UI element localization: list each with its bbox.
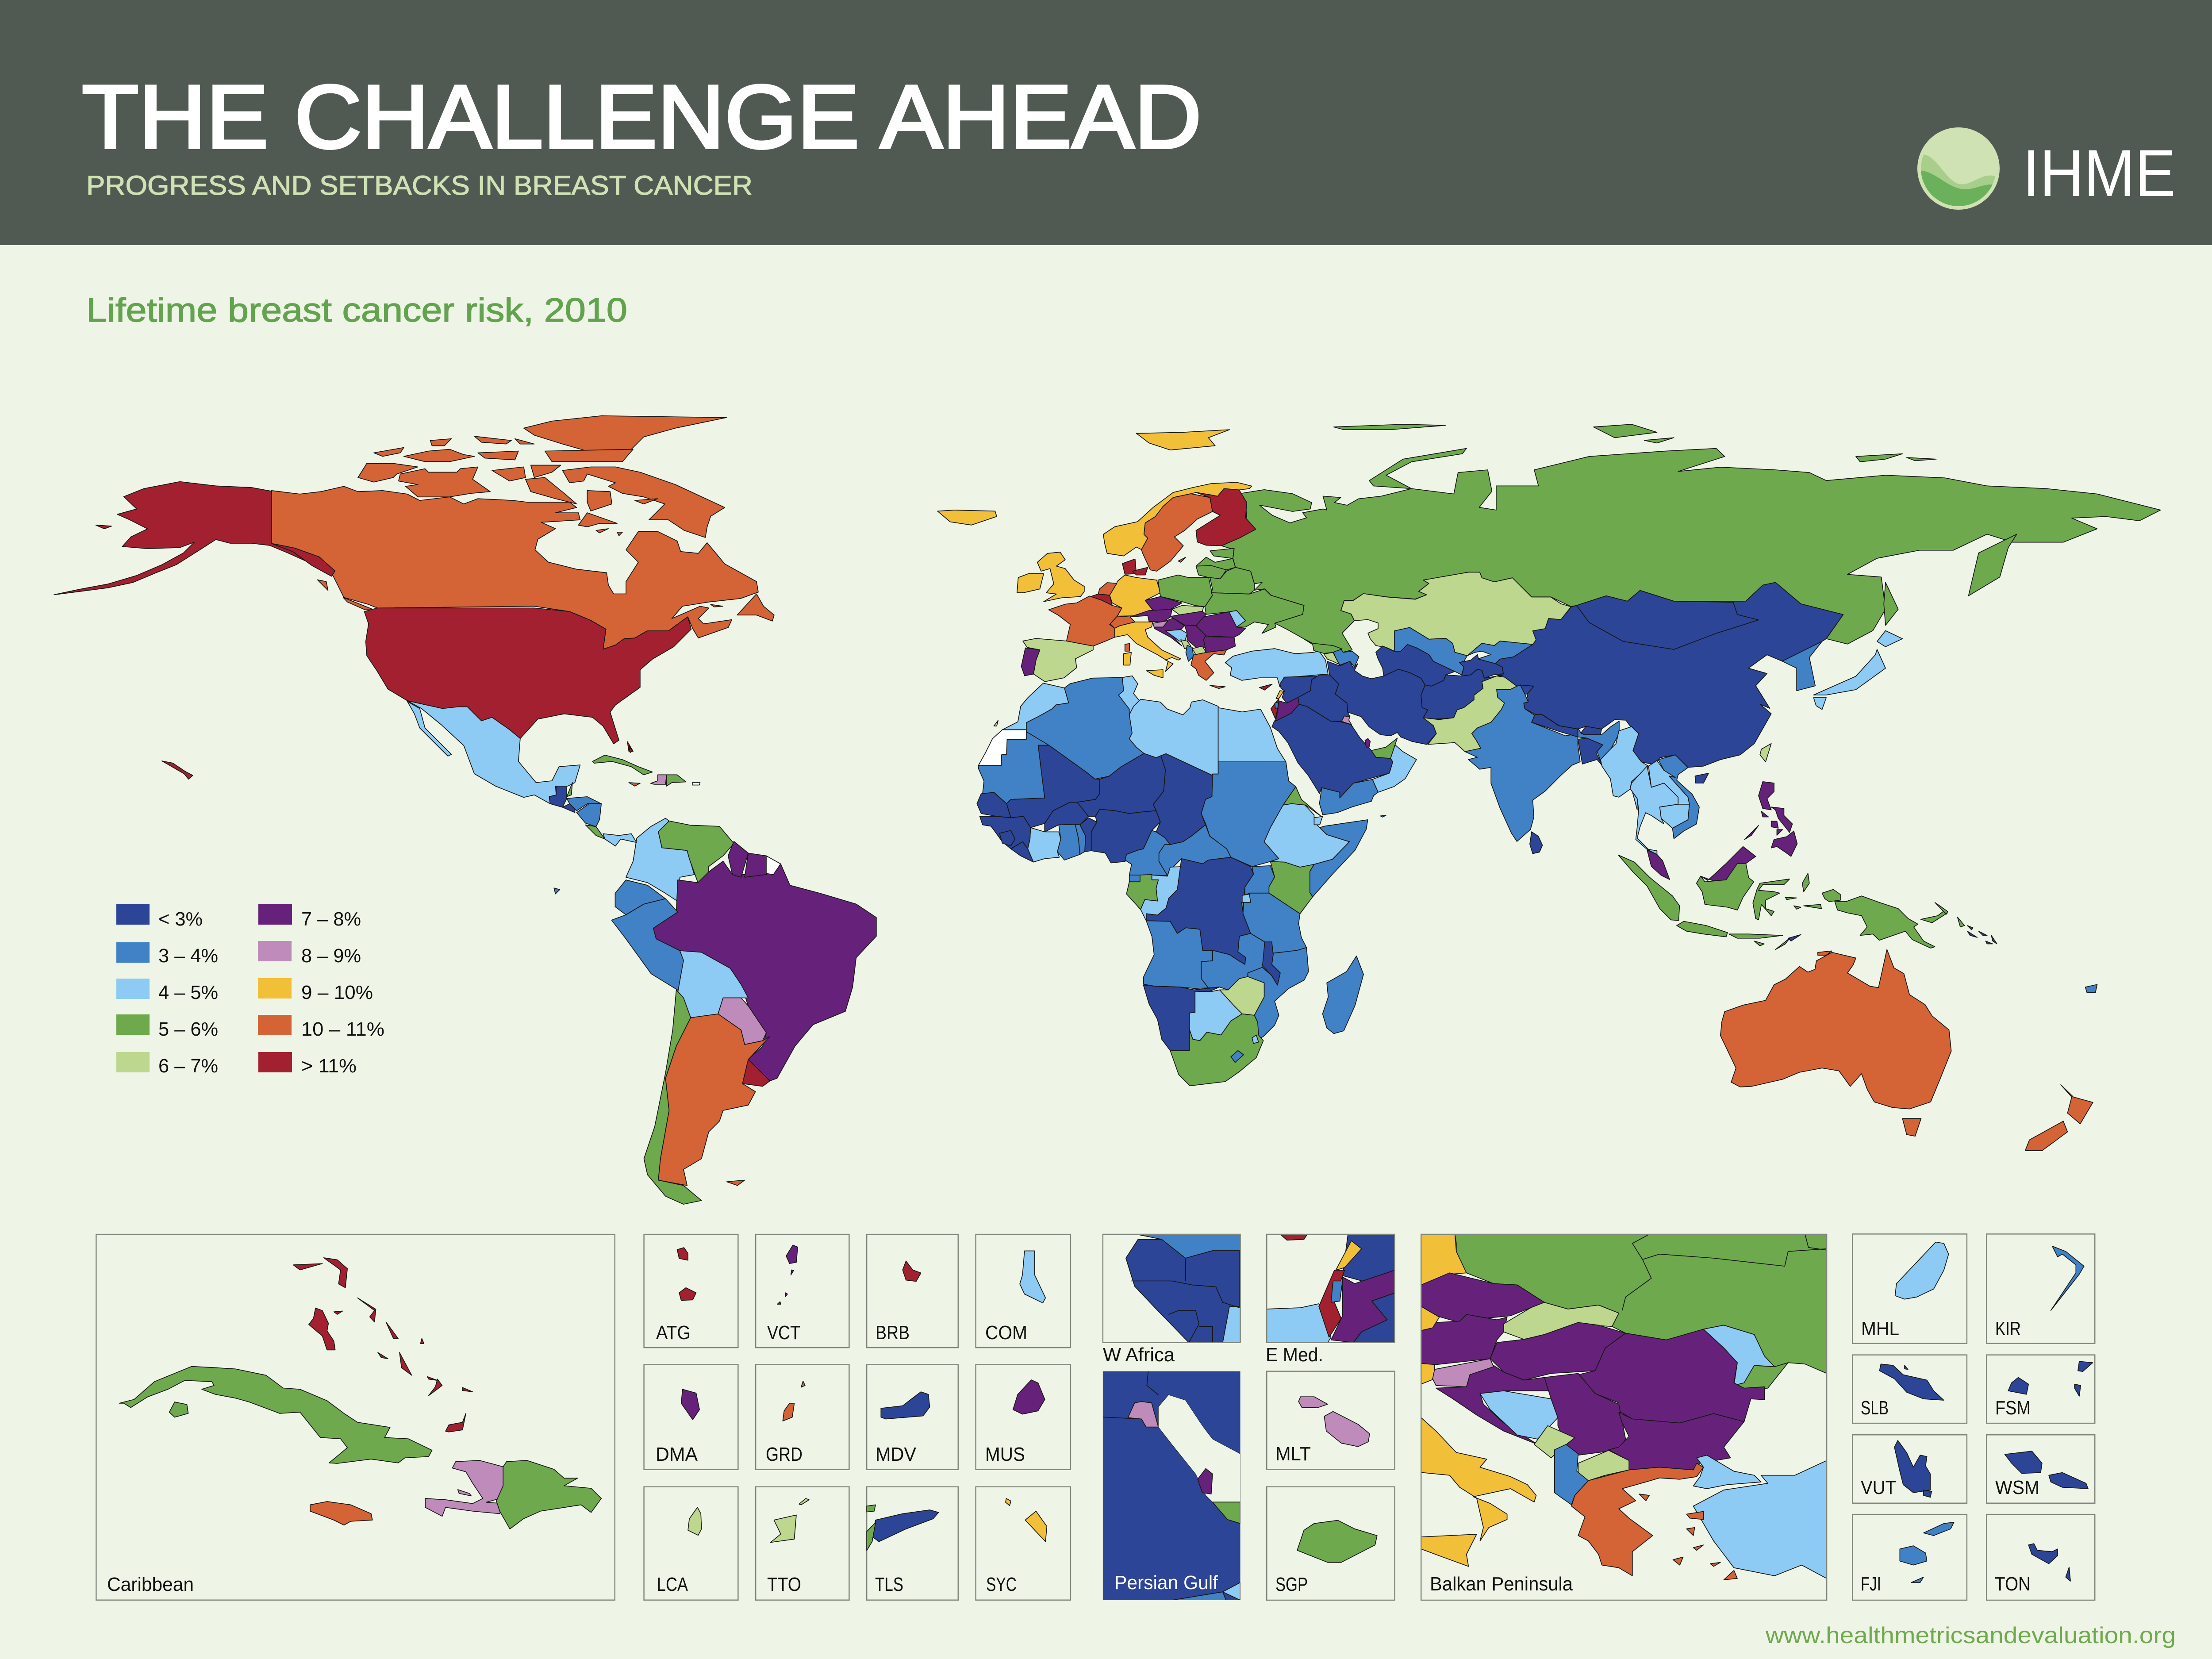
icon: IHME logo: [1917, 127, 2000, 212]
inset labels: [107, 1318, 2039, 1595]
inset labels: SLB: [1861, 1397, 1889, 1419]
logo wordmark: IHME: [2023, 136, 2176, 210]
world map: Middle East and South Asia: [1271, 572, 1619, 854]
panel: BRB: [867, 1234, 958, 1348]
panel: LCA: [644, 1487, 738, 1600]
Russia: [1221, 424, 2161, 652]
legend: 4-5%: 4 – 5%: [158, 982, 218, 1003]
Indochina: [1601, 726, 1771, 879]
legend: 7-8%: [258, 904, 361, 930]
legend: 3-4%: 3 – 4%: [158, 945, 218, 967]
website URL: www.healthmetricsandevaluation.org: [1765, 1623, 2176, 1648]
New Guinea and Melanesia: [1835, 896, 1997, 948]
panel: GRD: [756, 1365, 849, 1470]
inset panels: Caribbean and small islands: [96, 1234, 1071, 1600]
panel: MHL: [1852, 1234, 1967, 1344]
legend: 3-4%: [116, 942, 218, 967]
inset labels: FSM: [1995, 1397, 2031, 1419]
legend: 5-6%: 5 – 6%: [158, 1018, 218, 1040]
world map: Southeast Asia and Oceania: [1601, 726, 1997, 1109]
panel: SGP: [1267, 1487, 1395, 1600]
panel: VUT: [1852, 1435, 1967, 1503]
inset labels: FJI: [1861, 1573, 1881, 1595]
panel: MLT: [1267, 1371, 1395, 1469]
legend: 8-9%: [258, 941, 361, 967]
legend: over 11%: > 11%: [301, 1055, 357, 1077]
inset labels: E Med.: [1266, 1344, 1323, 1366]
inset labels: MUS: [985, 1444, 1025, 1465]
inset labels: VUT: [1861, 1477, 1896, 1498]
Caribbean islands: [592, 745, 700, 786]
inset labels: COM: [985, 1322, 1027, 1344]
panel: KIR: [1986, 1234, 2095, 1344]
United States: [365, 608, 691, 744]
inset labels: TTO: [767, 1574, 801, 1595]
China, Mongolia, Korea, Japan: [1495, 583, 1902, 768]
panel: SLB: [1852, 1355, 1967, 1423]
inset labels: MHL: [1861, 1318, 1899, 1340]
inset labels: LCA: [657, 1574, 688, 1595]
inset labels: W Africa: [1103, 1344, 1175, 1366]
title: THE CHALLENGE AHEAD: [82, 67, 1202, 167]
panel: SYC: [976, 1487, 1071, 1600]
Canada: [272, 416, 774, 649]
world map: North America: [272, 416, 774, 846]
panel: WSM: [1986, 1435, 2095, 1503]
legend: 9-10%: [258, 978, 373, 1003]
world map: Africa: [977, 676, 1368, 1086]
panel: Caribbean: [96, 1234, 615, 1600]
legend: over 11%: [258, 1052, 357, 1077]
panel: COM: [976, 1234, 1071, 1348]
inset labels: SYC: [986, 1574, 1017, 1595]
map heading: Lifetime breast cancer risk, 2010: [86, 292, 627, 329]
legend: 5-6%: [116, 1014, 218, 1040]
inset panels: regional and Pacific islands: [1103, 1234, 2095, 1600]
inset labels: TON: [1995, 1573, 2031, 1595]
panel: E Med: [1267, 1234, 1395, 1343]
inset labels: Balkan Peninsula: [1430, 1573, 1573, 1595]
panel: TLS: [867, 1487, 958, 1600]
inset labels: MLT: [1275, 1443, 1311, 1465]
inset labels: Persian Gulf: [1114, 1572, 1218, 1594]
panel: Persian Gulf: [1103, 1371, 1240, 1600]
panel: DMA: [644, 1365, 738, 1470]
legend: 9-10%: 9 – 10%: [301, 982, 373, 1003]
inset labels: BRB: [876, 1322, 910, 1344]
New Zealand and Tasmania: [1902, 984, 2097, 1151]
Australia: [1720, 949, 1951, 1109]
inset labels: MDV: [876, 1444, 917, 1465]
panel: W Africa: [1103, 1234, 1240, 1343]
legend: 6-7%: 6 – 7%: [158, 1055, 218, 1077]
legend: under 3%: < 3%: [158, 908, 203, 930]
inset labels: GRD: [766, 1444, 803, 1465]
inset labels: DMA: [656, 1444, 698, 1465]
panel: MDV: [867, 1365, 958, 1470]
legend: 10-11%: 10 – 11%: [301, 1018, 384, 1040]
legend: 7-8%: 7 – 8%: [301, 908, 361, 930]
Iceland and Svalbard: [937, 430, 1229, 525]
world map: Alaska and South America: [54, 482, 876, 1204]
legend: [116, 904, 384, 1077]
panel: TON: [1986, 1514, 2095, 1600]
panel: Balkan Peninsula: [1421, 1234, 1827, 1600]
world map: Russia and East Asia: [937, 424, 2161, 1151]
header band: [0, 0, 2212, 245]
world map: Europe: [1017, 482, 1328, 690]
legend: 8-9%: 8 – 9%: [301, 945, 361, 967]
panel: FSM: [1986, 1355, 2095, 1423]
panel: ATG: [644, 1234, 738, 1348]
inset labels: WSM: [1995, 1477, 2039, 1498]
inset labels: TLS: [875, 1574, 903, 1595]
panel: TTO: [756, 1487, 849, 1600]
Indonesia and Malaysia: [1618, 847, 1840, 949]
Mexico: [407, 701, 580, 804]
subtitle: PROGRESS AND SETBACKS IN BREAST CANCER: [86, 170, 753, 200]
legend: 10-11%: [258, 1015, 384, 1040]
Central America: [549, 783, 637, 846]
legend: under 3%: [116, 904, 203, 930]
legend: 6-7%: [116, 1052, 218, 1077]
legend: 4-5%: [116, 979, 218, 1003]
inset labels: VCT: [767, 1322, 800, 1344]
inset labels: Caribbean: [107, 1574, 194, 1595]
South America: [554, 818, 876, 1204]
panel: VCT: [756, 1234, 849, 1348]
Philippines: [1744, 782, 1797, 856]
panel: MUS: [976, 1365, 1071, 1470]
inset labels: SGP: [1275, 1574, 1308, 1595]
inset labels: ATG: [656, 1322, 691, 1344]
inset labels: KIR: [1995, 1318, 2021, 1340]
panel: FJI: [1852, 1514, 1967, 1600]
Alaska and Hawaii: [54, 482, 633, 779]
